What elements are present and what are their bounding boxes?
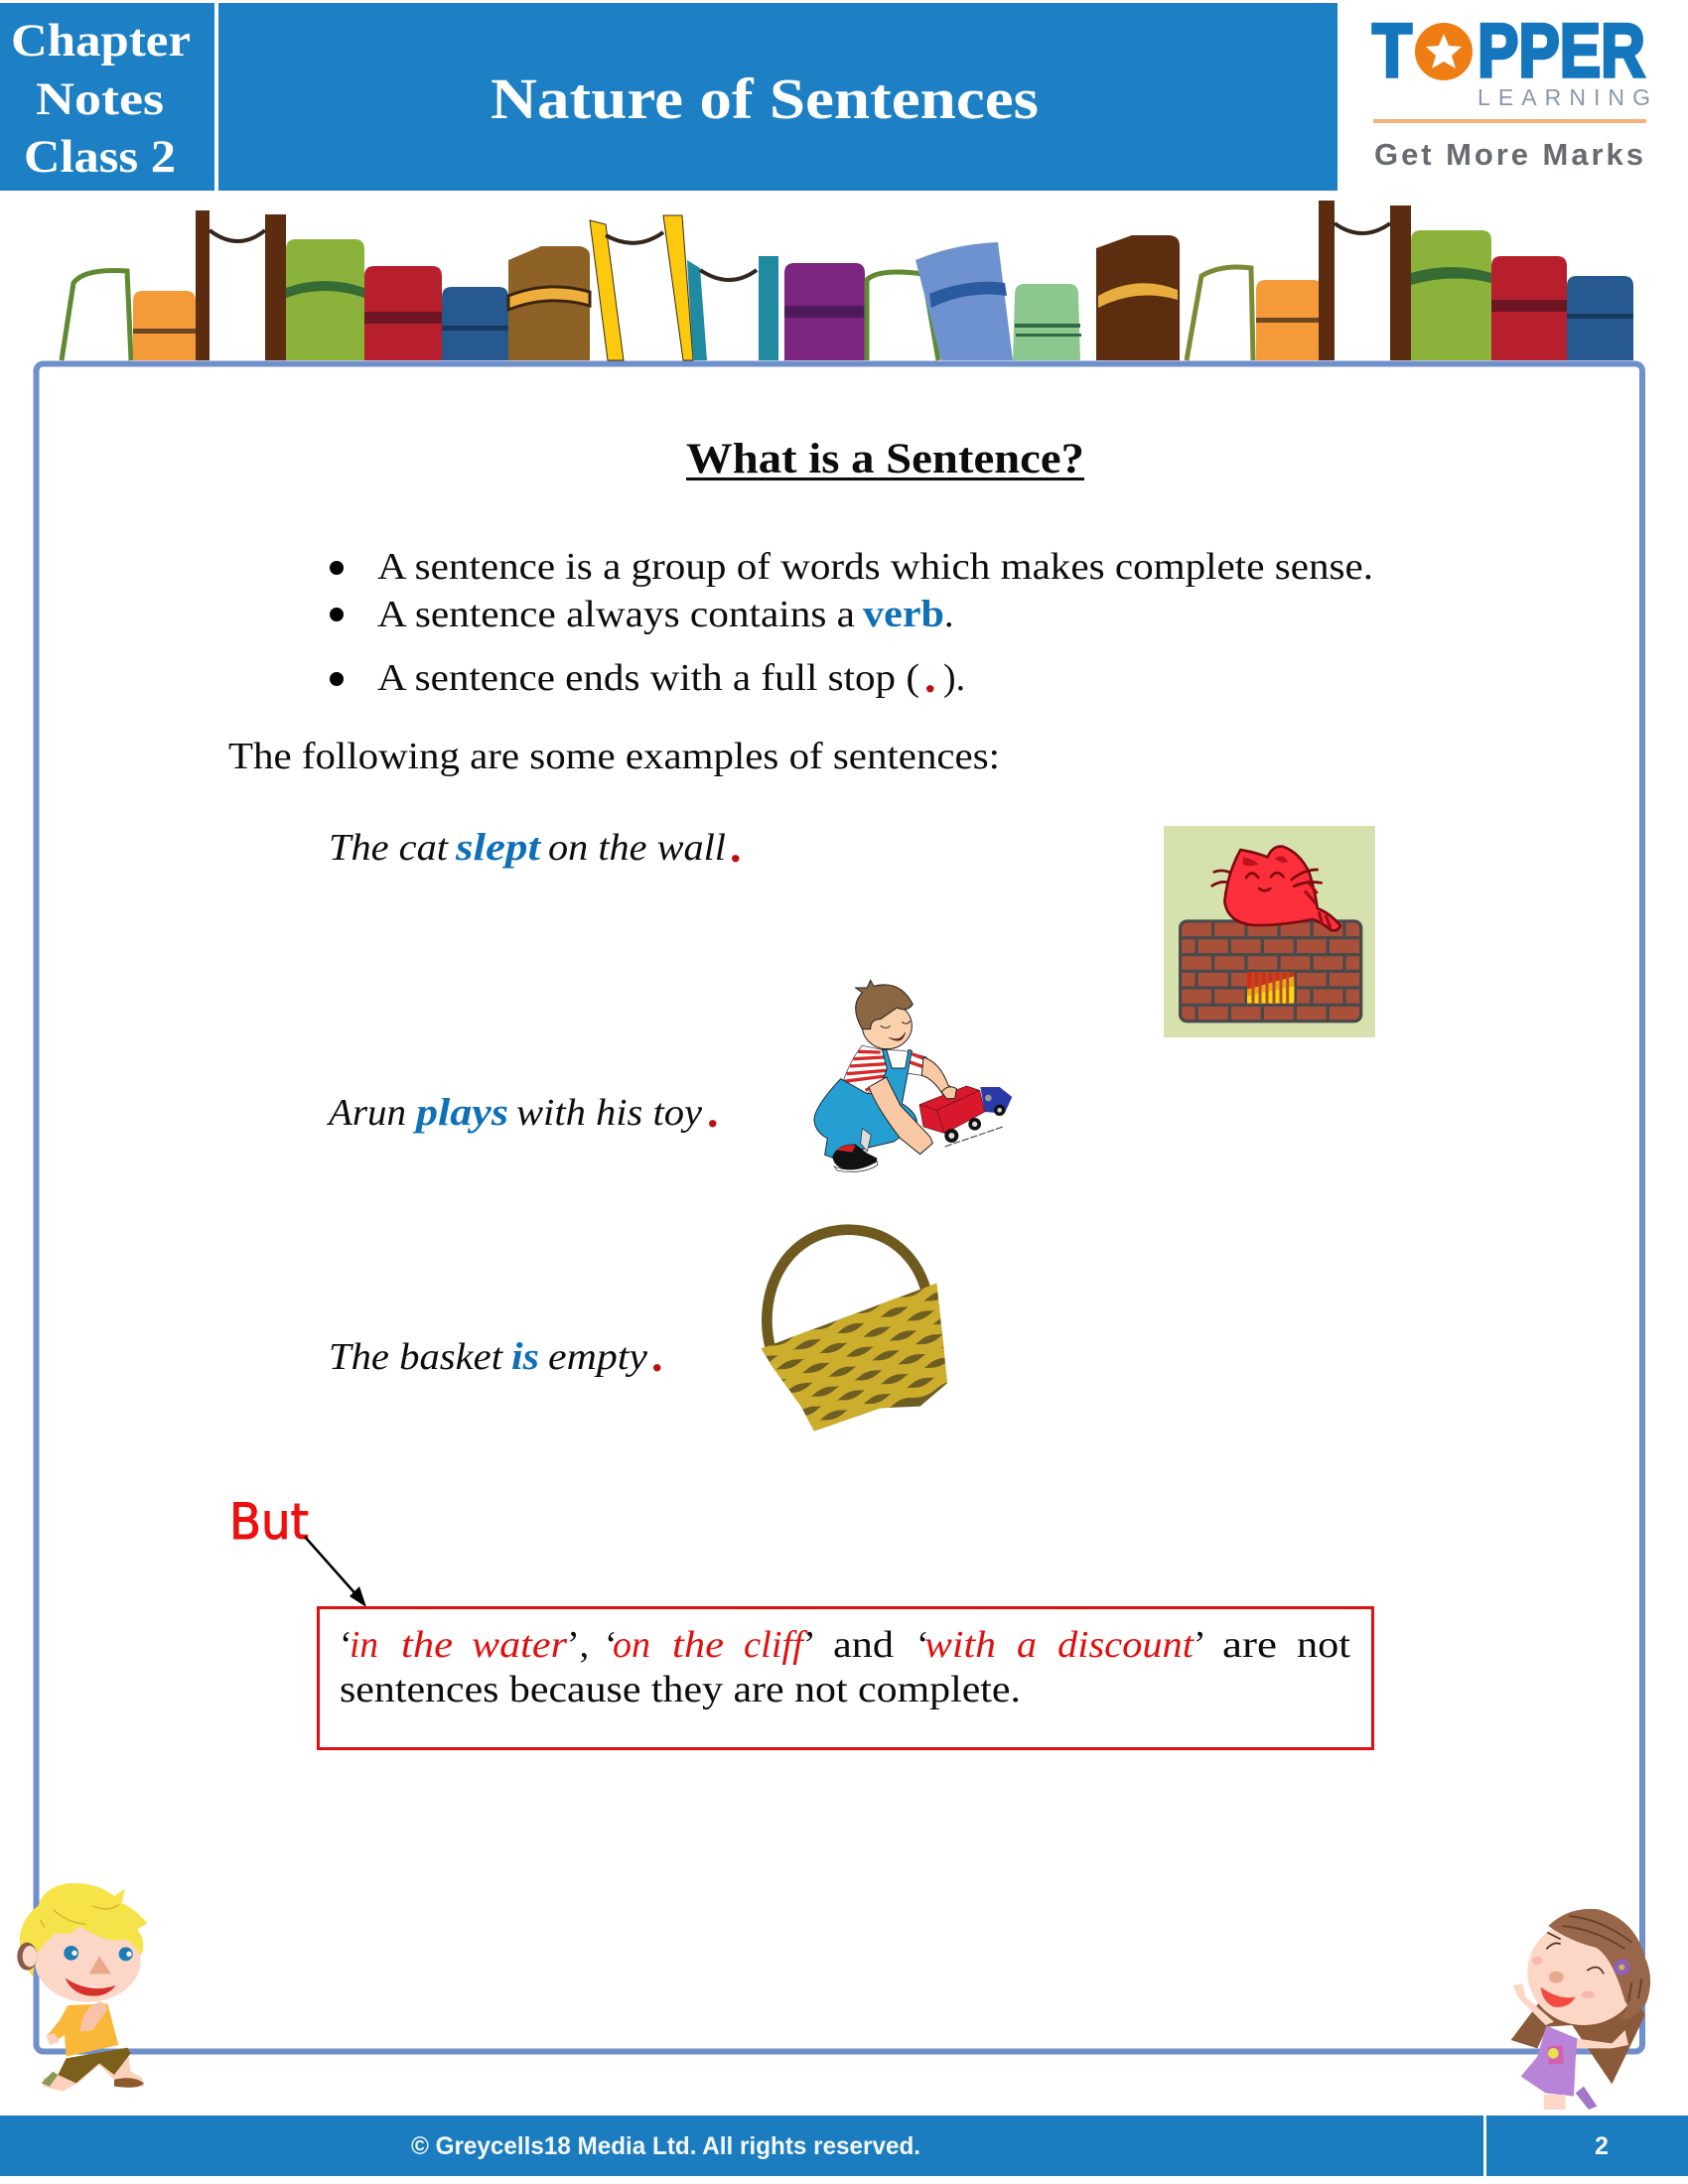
callout: non-sentences: the xyxy=(672,1624,724,1666)
logo: Topper Learning: Get More Marks xyxy=(1374,137,1643,172)
book 14 xyxy=(1096,235,1180,360)
text: examples intro: The following are some examples of sentences: xyxy=(228,736,1000,777)
book 17 xyxy=(1319,201,1411,360)
callout: non-sentences xyxy=(318,1608,1372,1749)
bullet list xyxy=(330,546,1373,702)
callout: non-sentences: with xyxy=(924,1624,996,1666)
book 6 xyxy=(442,287,508,360)
header band: chapter notes: Class 2 xyxy=(24,131,176,183)
footer bar: 2 xyxy=(1595,2132,1609,2160)
callout: non-sentences: ’ xyxy=(1194,1624,1206,1666)
example sentence 3: . xyxy=(651,1330,663,1381)
example sentence 2: Arun xyxy=(326,1092,406,1134)
example sentence 2: with his toy xyxy=(516,1092,702,1134)
example sentence 1: The cat xyxy=(329,827,450,869)
example sentence 3 xyxy=(329,1330,663,1381)
header band: title xyxy=(218,3,1337,191)
book 18 xyxy=(1411,230,1491,360)
bullet 2 xyxy=(330,593,953,635)
book 5 xyxy=(364,266,442,360)
footer bar xyxy=(0,2116,1688,2176)
example sentence 1: on the wall xyxy=(548,827,726,869)
book 15 xyxy=(1187,267,1253,360)
callout: non-sentences: not xyxy=(1297,1624,1350,1666)
bullet 2: A sentence always contains a xyxy=(377,594,855,635)
arrow: But to callout xyxy=(305,1537,366,1607)
example image: cat on wall xyxy=(1164,826,1375,1037)
callout: non-sentences: sentences because they are not complete. xyxy=(340,1669,1021,1710)
callout: non-sentences: the xyxy=(401,1624,453,1666)
book 4 xyxy=(286,239,364,360)
book 10 xyxy=(784,263,865,360)
book 11 xyxy=(867,272,938,360)
book 13 xyxy=(1013,284,1081,360)
illustration: girl character xyxy=(1511,1909,1650,2110)
bullet 3 xyxy=(330,651,965,702)
callout: non-sentences: ’, xyxy=(567,1624,589,1666)
bullet 1: A sentence is a group of words which makes complete sense. xyxy=(377,546,1373,588)
example sentence 2 xyxy=(326,1086,719,1137)
book 2 xyxy=(133,291,196,360)
label: But: But xyxy=(229,1493,309,1551)
callout: non-sentences: ‘ xyxy=(605,1624,618,1666)
book 12 xyxy=(915,242,1013,360)
book 19 xyxy=(1491,256,1567,360)
book 3 xyxy=(196,210,286,360)
bullet 2: . xyxy=(944,594,953,635)
header band: chapter notes: Chapter xyxy=(11,15,191,67)
logo: Topper Learning: LEARNING xyxy=(1477,84,1650,110)
callout: non-sentences: in xyxy=(350,1624,378,1666)
header band: chapter notes xyxy=(0,3,214,191)
example sentence 1: . xyxy=(730,821,741,872)
book 9 xyxy=(687,256,778,360)
example sentence 2: plays xyxy=(413,1091,508,1134)
header band: title: Nature of Sentences xyxy=(491,67,1039,131)
bullet 3: A sentence ends with a full stop ( xyxy=(377,657,919,699)
example sentence 1: slept xyxy=(455,826,541,869)
callout: non-sentences: and xyxy=(833,1624,894,1666)
bullet 3: . xyxy=(924,651,935,702)
illustration: boy character xyxy=(17,1883,147,2092)
callout: non-sentences: water xyxy=(472,1624,567,1666)
bullet 2: verb xyxy=(863,593,944,635)
logo: Topper Learning: T xyxy=(1372,9,1412,93)
example sentence 1 xyxy=(329,821,741,872)
callout: non-sentences: cliff xyxy=(744,1624,807,1666)
example sentence 3: The basket xyxy=(329,1336,504,1378)
logo: Topper Learning: PPER xyxy=(1477,9,1645,93)
book 8 xyxy=(590,215,693,360)
book 1 xyxy=(62,270,131,360)
bullet 3: ). xyxy=(943,657,965,699)
illustration: row of books xyxy=(62,201,1633,360)
header band: chapter notes: Notes xyxy=(36,73,164,125)
example image: wicker basket xyxy=(761,1224,947,1432)
heading: What is a Sentence?: What is a Sentence? xyxy=(686,436,1084,482)
callout: non-sentences: discount xyxy=(1057,1624,1196,1666)
book 20 xyxy=(1567,276,1633,360)
callout: non-sentences: are xyxy=(1222,1624,1277,1666)
logo: Topper Learning xyxy=(1372,9,1650,172)
callout: non-sentences: on xyxy=(613,1624,650,1666)
book 16 xyxy=(1256,280,1323,360)
callout: non-sentences: a xyxy=(1017,1624,1037,1666)
callout: non-sentences: ’ xyxy=(803,1624,816,1666)
example sentence 3: empty xyxy=(548,1336,647,1378)
book 7 xyxy=(508,246,590,360)
callout: non-sentences: ‘ xyxy=(340,1624,352,1666)
example image: boy playing with toy truck xyxy=(814,980,1012,1171)
example sentence 3: is xyxy=(511,1335,539,1378)
content frame xyxy=(36,363,1642,2051)
example sentence 2: . xyxy=(707,1086,719,1137)
footer bar: © Greycells18 Media Ltd. All rights reserved. xyxy=(411,2132,920,2160)
callout: non-sentences: ‘ xyxy=(916,1624,929,1666)
